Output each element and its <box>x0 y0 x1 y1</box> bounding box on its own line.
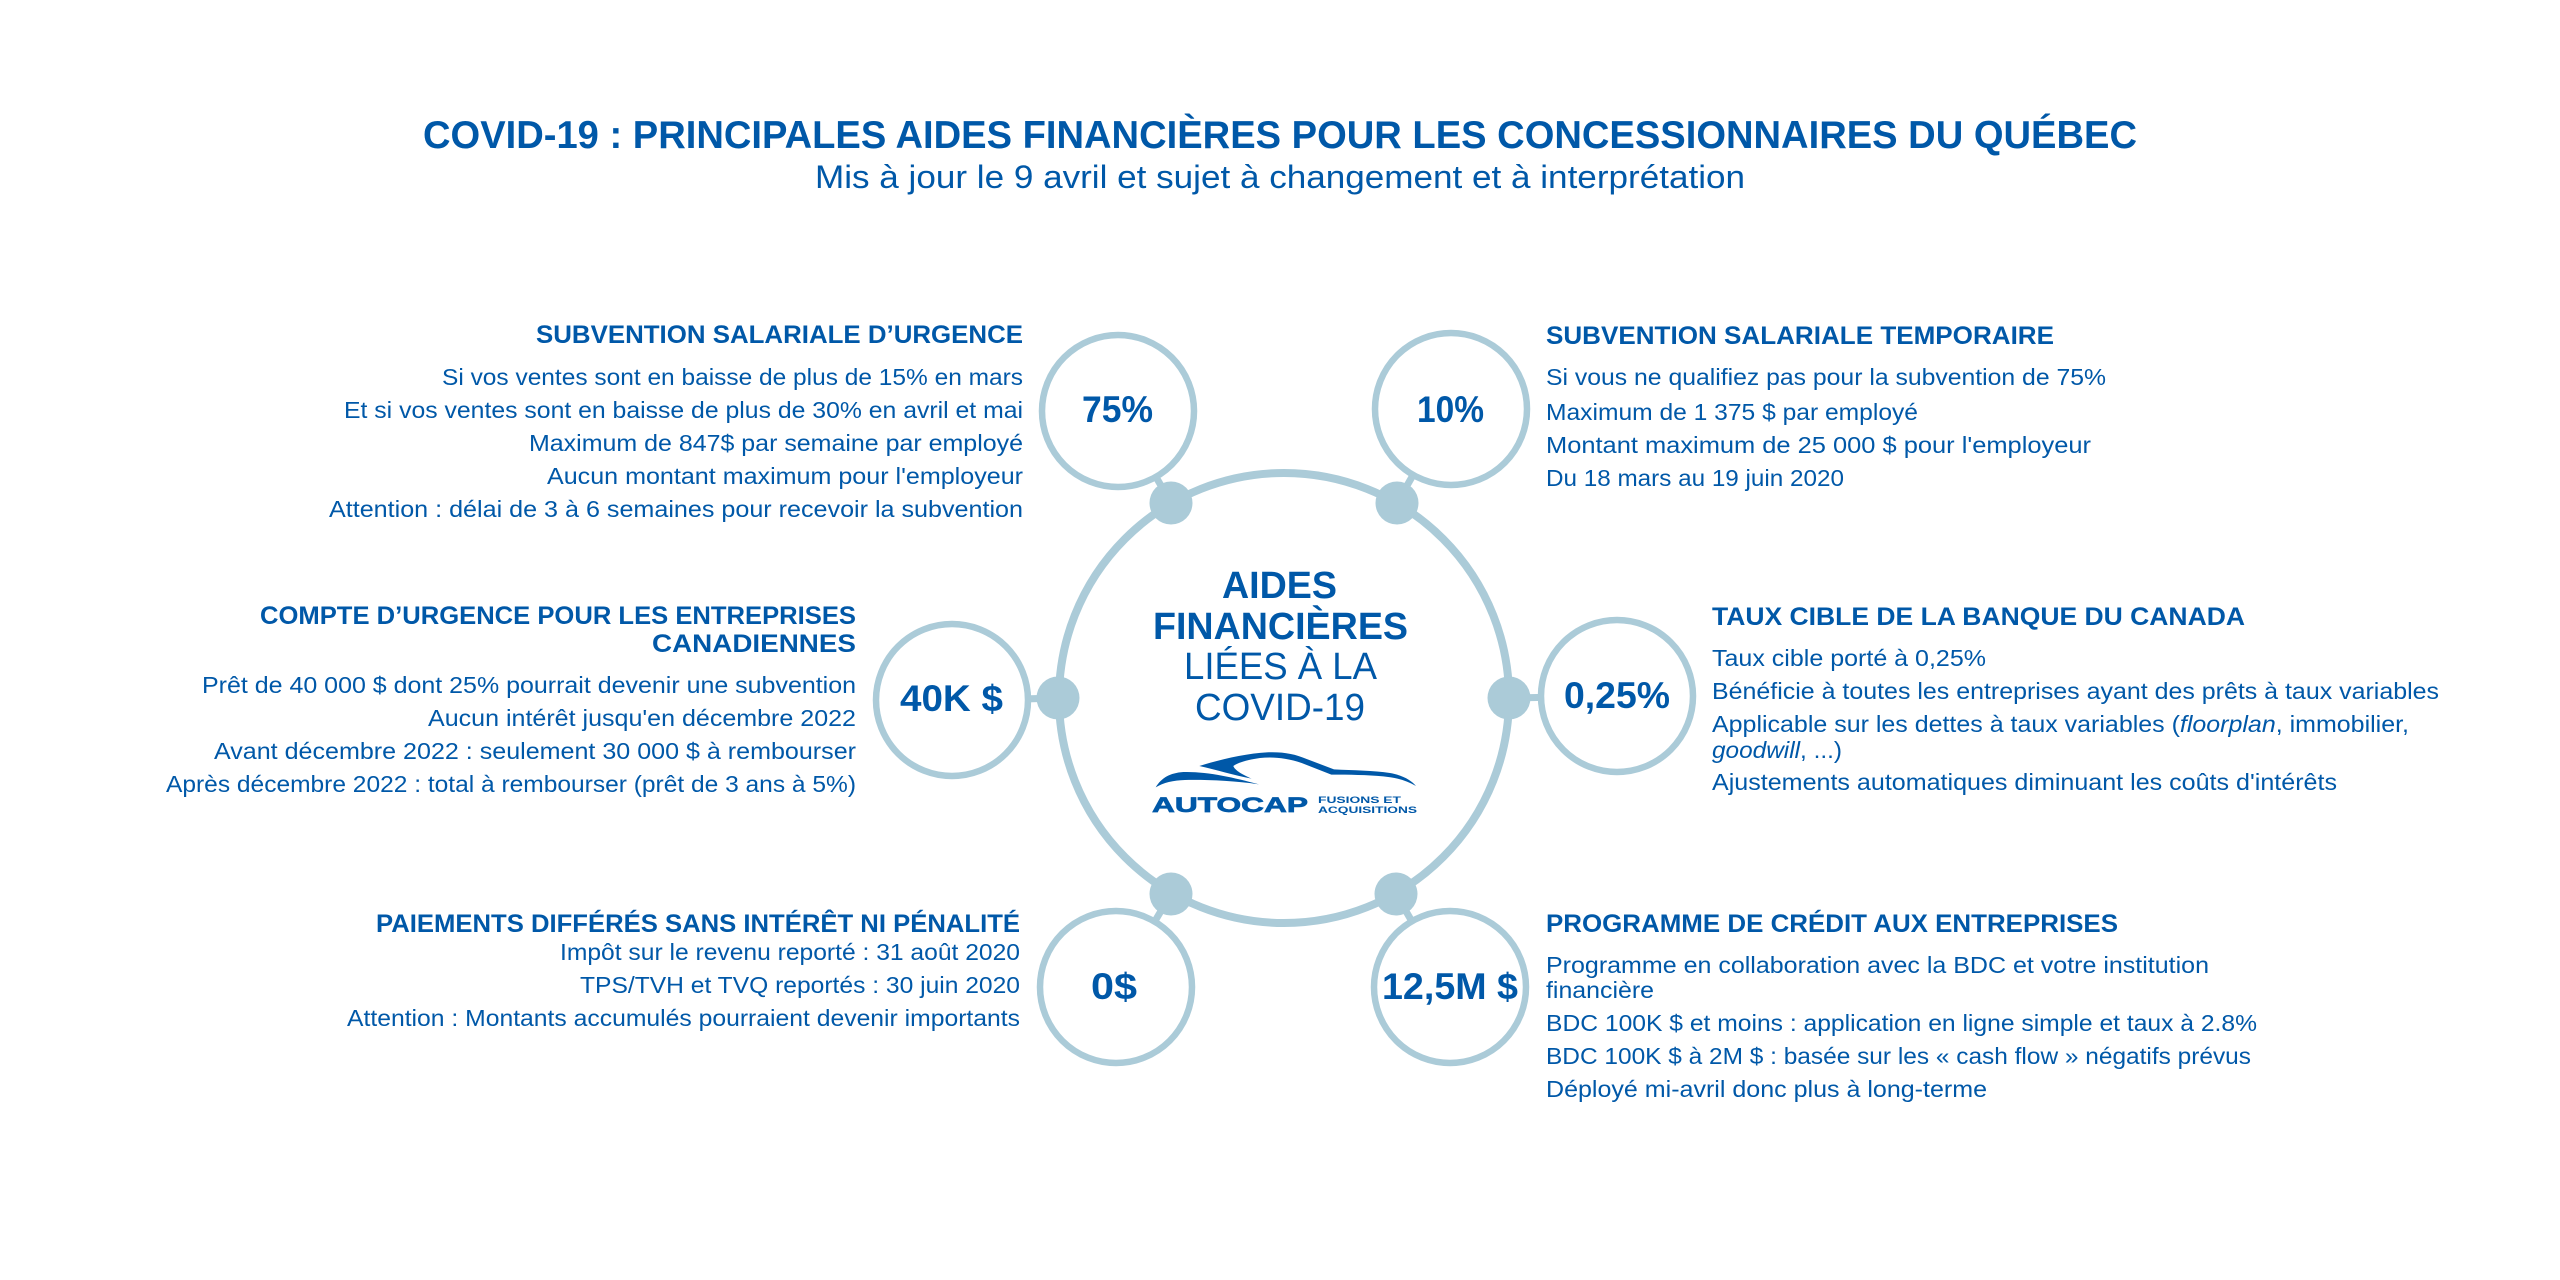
text block: details: Déployé mi-avril donc plus à long-terme <box>1546 1076 1987 1102</box>
text block: details: goodwill, ...) <box>1712 737 1842 763</box>
panel: 40K $ <box>166 602 1028 797</box>
text block: details <box>1712 645 2439 795</box>
panel: 12,5M $ <box>1374 909 2257 1102</box>
text block: details: BDC 100K $ à 2M $ : basée sur les « cash flow » négatifs prévus <box>1546 1043 2251 1069</box>
text block: conditions: Maximum de 1 375 $ par employé <box>1546 399 1918 425</box>
subtitle: Mis à jour le 9 avril et sujet à changement et à interprétation <box>815 159 1745 195</box>
text block: details: TPS/TVH et TVQ reportés : 30 juin 2020 <box>580 972 1020 998</box>
text block: details: BDC 100K $ et moins : application en ligne simple et taux à 2.8% <box>1546 1010 2257 1036</box>
central heading <box>1153 565 1408 729</box>
text block: conditions: Et si vos ventes sont en baisse de plus de 30% en avril et mai <box>344 397 1023 423</box>
text block: conditions: Si vous ne qualifiez pas pour la subvention de 75% <box>1546 364 2106 390</box>
heading: compte d'urgence: CANADIENNES <box>652 630 856 658</box>
text block: details: Impôt sur le revenu reporté : 31 août 2020 <box>560 939 1020 965</box>
text block: details: Ajustements automatiques diminuant les coûts d'intérêts <box>1712 769 2337 795</box>
icon: car silhouette <box>1156 752 1416 787</box>
logo wordmark: AUTOCAP <box>1152 794 1308 817</box>
badge: 12,5M $: 12,5M $ <box>1382 966 1518 1007</box>
text block: details <box>347 939 1020 1031</box>
badge: 0$ <box>1040 911 1192 1063</box>
text block: details: Bénéficie à toutes les entreprises ayant des prêts à taux variables <box>1712 678 2439 704</box>
badge: 0,25% <box>1541 620 1693 772</box>
heading: programme de crédit: PROGRAMME DE CRÉDIT AUX ENTREPRISES <box>1546 909 2118 938</box>
text block: conditions <box>329 364 1023 522</box>
logo wordmark <box>1152 794 1417 817</box>
badge: 10% <box>1375 333 1527 485</box>
text block: details: Taux cible porté à 0,25% <box>1712 645 1986 671</box>
logo wordmark: FUSIONS ET <box>1318 795 1402 805</box>
title: COVID-19 : PRINCIPALES AIDES FINANCIÈRES POUR LES CONCESSIONNAIRES DU QUÉBEC <box>423 113 2137 157</box>
panel: 75% <box>329 321 1194 522</box>
central heading: AIDES <box>1222 565 1337 607</box>
logo wordmark: ACQUISITIONS <box>1318 805 1417 815</box>
text block: conditions <box>1546 364 2106 491</box>
connector stubs <box>952 409 1617 987</box>
text block: conditions: Avant décembre 2022 : seulement 30 000 $ à rembourser <box>214 738 856 764</box>
main ring <box>1059 473 1509 923</box>
badge: 75%: 75% <box>1082 389 1153 430</box>
heading: subvention salariale d'urgence: SUBVENTION SALARIALE D’URGENCE <box>536 321 1023 349</box>
text block: conditions: Attention : délai de 3 à 6 semaines pour recevoir la subvention <box>329 496 1023 522</box>
central heading: LIÉES À LA <box>1184 645 1378 688</box>
logo: Autocap <box>1152 752 1417 817</box>
central hub diagram <box>952 409 1617 987</box>
text block: details: Programme en collaboration avec la BDC et votre institution <box>1546 952 2209 978</box>
heading: taux cible: TAUX CIBLE DE LA BANQUE DU CANADA <box>1712 603 2245 631</box>
text block: details: Attention : Montants accumulés pourraient devenir importants <box>347 1005 1020 1031</box>
badge: 0$: 0$ <box>1091 966 1137 1007</box>
node dots <box>1036 482 1530 916</box>
heading: compte d'urgence: COMPTE D’URGENCE POUR LES ENTREPRISES <box>260 602 856 630</box>
text block: conditions: Montant maximum de 25 000 $ pour l'employeur <box>1546 432 2091 458</box>
panel: 0,25% <box>1541 603 2439 795</box>
text block: conditions <box>166 672 856 797</box>
text block: details: Applicable sur les dettes à taux variables ( floorplan, immobilier, <box>1712 711 2409 737</box>
text block: details: financière <box>1546 977 1654 1003</box>
badge: 75% <box>1042 335 1194 487</box>
text block: conditions: Si vos ventes sont en baisse de plus de 15% en mars <box>442 364 1023 390</box>
text block: details <box>1546 952 2257 1102</box>
text block: conditions: Du 18 mars au 19 juin 2020 <box>1546 465 1844 491</box>
text block: conditions: Prêt de 40 000 $ dont 25% pourrait devenir une subvention <box>202 672 856 698</box>
heading: subvention salariale temporaire: SUBVENTION SALARIALE TEMPORAIRE <box>1546 322 2054 350</box>
badge: 40K $ <box>876 624 1028 776</box>
badge: 10%: 10% <box>1417 389 1484 430</box>
badge: 40K $: 40K $ <box>900 678 1003 719</box>
badge: 12,5M $ <box>1374 911 1526 1063</box>
heading: compte d'urgence <box>260 602 856 658</box>
badge: 0,25%: 0,25% <box>1564 675 1670 716</box>
central heading: FINANCIÈRES <box>1153 604 1408 648</box>
panel: 0$ <box>347 908 1192 1063</box>
central heading: COVID-19 <box>1195 687 1365 729</box>
text block: conditions: Après décembre 2022 : total à rembourser (prêt de 3 ans à 5%) <box>166 771 856 797</box>
text block: conditions: Aucun montant maximum pour l'employeur <box>547 463 1023 489</box>
panel: 10% <box>1375 322 2106 491</box>
text block: conditions: Maximum de 847$ par semaine par employé <box>529 430 1023 456</box>
text block: conditions: Aucun intérêt jusqu'en décembre 2022 <box>428 705 856 731</box>
heading: paiements différés: PAIEMENTS DIFFÉRÉS SANS INTÉRÊT NI PÉNALITÉ <box>376 908 1020 938</box>
